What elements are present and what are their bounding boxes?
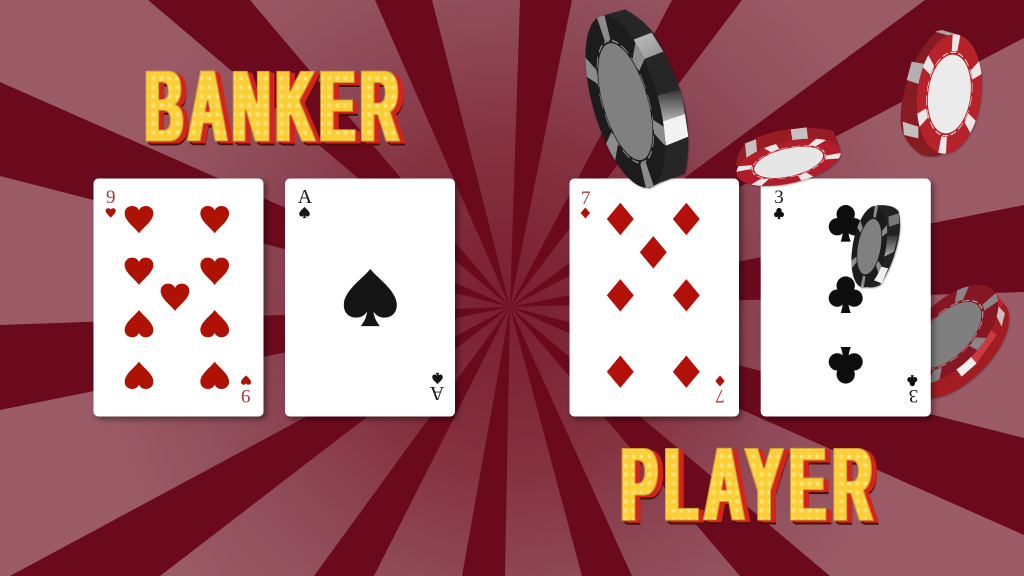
rank top: 9 (106, 187, 115, 208)
diamond pips (581, 203, 725, 388)
rank top: 7 (581, 188, 590, 209)
chip: red lower right, behind card (881, 268, 1024, 415)
rank top: A (298, 186, 313, 208)
rank bottom: 3 (909, 385, 918, 406)
rank top: 3 (774, 187, 784, 208)
card: three of clubs (761, 178, 931, 416)
chip: small black on card (846, 203, 900, 290)
spade pips (299, 207, 443, 384)
chip: large black (569, 7, 688, 196)
hearts pips (106, 206, 251, 389)
chip: red upper right (901, 30, 988, 157)
club pips (774, 205, 917, 386)
heading: PLAYER: PLAYER (621, 426, 879, 543)
chip: red flat (732, 127, 845, 195)
heading: BANKER: BANKER (145, 51, 404, 164)
card: nine of hearts (94, 178, 264, 416)
rank bottom: A (429, 382, 444, 404)
card: ace of spades (285, 178, 455, 416)
card: seven of diamonds (570, 178, 739, 416)
rank bottom: 9 (241, 385, 250, 406)
rank bottom: 7 (715, 385, 725, 406)
